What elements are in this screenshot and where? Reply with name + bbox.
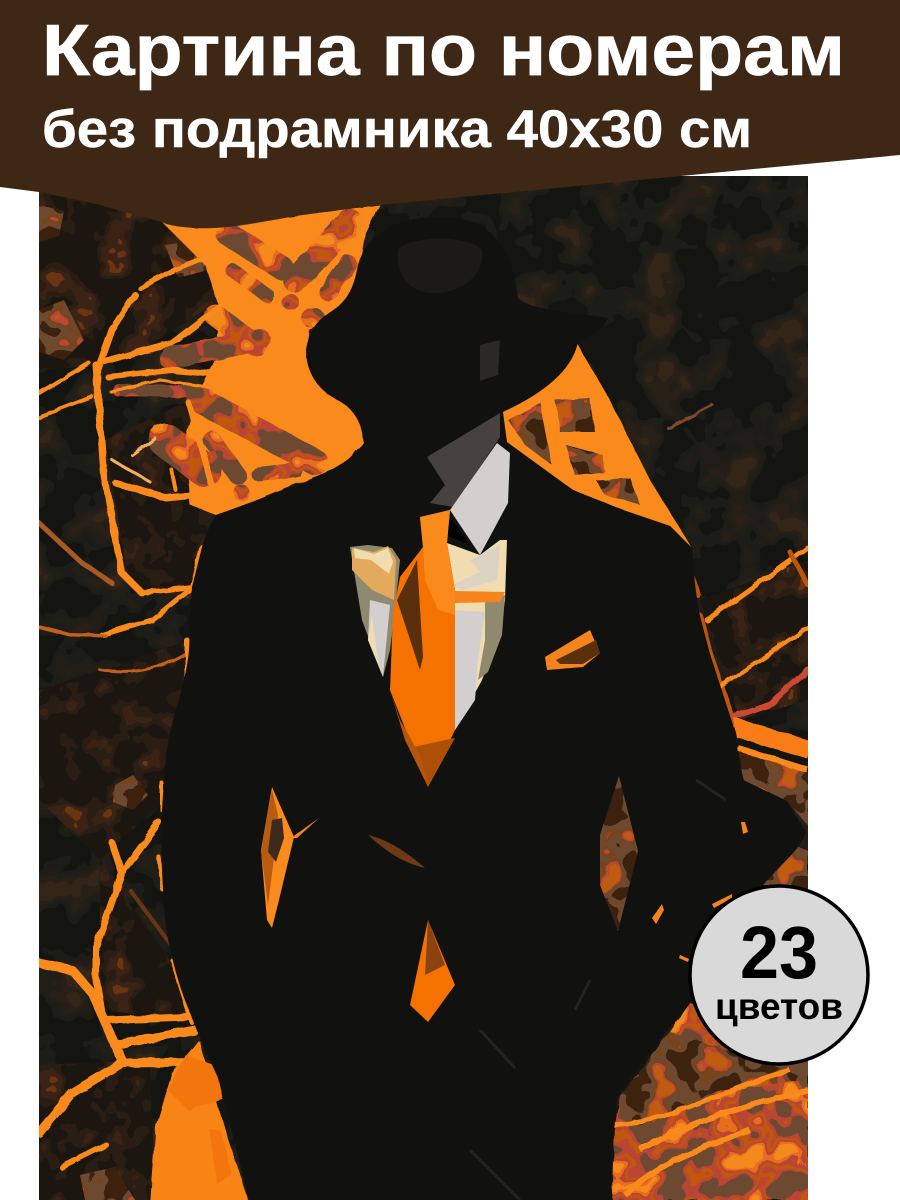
hat band shadow: [480, 340, 500, 381]
right coat opening: [600, 776, 638, 931]
small orange accents: [291, 818, 748, 962]
orange block bottom left: [150, 1040, 250, 1200]
painting: man in hat and suit: [39, 176, 808, 1200]
collar gap: [448, 518, 470, 544]
coat seam: [368, 835, 425, 868]
shirt right side: [447, 540, 507, 730]
orange collar upper right: [500, 340, 692, 548]
shirt collar right: [450, 443, 510, 555]
orange web lines lower left: [39, 783, 195, 1167]
header banner: [0, 0, 900, 228]
jacket flap: [410, 920, 455, 1022]
shirt left side: [350, 545, 400, 677]
badge label: цветов: [715, 986, 843, 1027]
orange tie: [390, 510, 455, 787]
orange web mass upper left: [162, 205, 380, 515]
brown mottled background regions: [39, 190, 808, 1200]
badge number: 23: [740, 911, 818, 994]
dark painting background: [39, 176, 808, 1200]
subtitle: без подрамника 40х30 см: [42, 100, 752, 159]
silhouette of man in hat and suit: [161, 217, 806, 1200]
orange web lines right: [668, 405, 808, 725]
orange bands right side: [733, 717, 808, 890]
collar patches: [508, 398, 640, 505]
lava patches in the background: [39, 205, 208, 1200]
orange mass bottom right: [612, 1003, 808, 1200]
face shadow: [427, 413, 500, 507]
badge: 23 colours: [690, 886, 868, 1064]
left coat opening: [261, 787, 294, 928]
orange web lines left: [39, 258, 222, 678]
lava patches inside the orange mass: [118, 222, 350, 493]
patches group: [118, 222, 350, 493]
title: Картина по номерам: [42, 11, 845, 91]
faint coat strokes: [470, 780, 726, 1200]
pocket square: [545, 630, 600, 670]
hat crown highlight: [397, 239, 482, 293]
